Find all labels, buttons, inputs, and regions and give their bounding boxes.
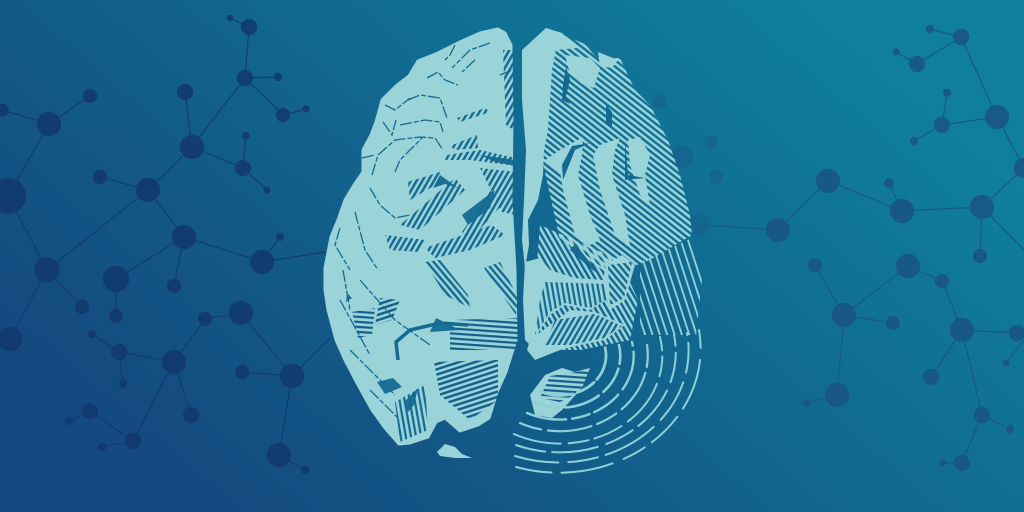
right hemisphere outer fine strokes — [640, 238, 702, 335]
right hemisphere — [514, 28, 702, 473]
right hemisphere deep folds — [562, 67, 645, 275]
right hemisphere gyrus hatching — [535, 262, 632, 345]
left hemisphere deep folds — [346, 155, 516, 412]
lower right contour lines — [514, 330, 701, 473]
left hemisphere — [325, 29, 518, 458]
neural network: left — [0, 16, 330, 474]
brain illustration — [325, 28, 702, 473]
right hemisphere lower hatched mass — [530, 225, 638, 350]
right hemisphere solid gyri — [522, 28, 650, 360]
neural network: right — [700, 26, 1024, 470]
left hemisphere hatched sulci — [352, 50, 518, 442]
left hemisphere silhouette — [325, 29, 516, 444]
right hemisphere upper hatched mass — [540, 28, 692, 275]
faint nodes beside brain — [653, 95, 723, 236]
lower left detached fragment — [437, 444, 472, 458]
lower right gyrus — [530, 368, 590, 418]
left hemisphere thin sulci — [335, 43, 512, 420]
lower right hatch on gyrus — [540, 370, 590, 402]
